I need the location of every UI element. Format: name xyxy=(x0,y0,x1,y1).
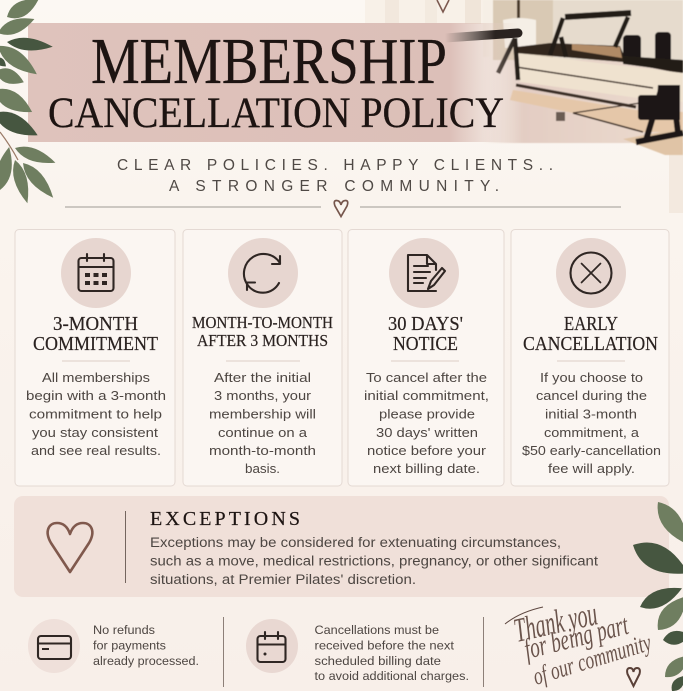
body text: you stay consistent xyxy=(32,425,158,440)
body text: commitment to help xyxy=(29,406,162,422)
note: cancellation deadline xyxy=(246,619,469,683)
heading: EARLY xyxy=(564,313,618,335)
body text: 3 months, your xyxy=(214,388,312,403)
tagline: CLEAR POLICIES. HAPPY CLIENTS.. xyxy=(117,157,553,174)
panel: early cancellation xyxy=(511,230,669,486)
body text: After the initial xyxy=(214,370,311,385)
body text: fee will apply. xyxy=(548,461,635,476)
text: scheduled billing date xyxy=(314,654,441,668)
handwritten thank you note: for being part xyxy=(521,609,632,666)
heading: exceptions: EXCEPTIONS xyxy=(150,508,300,530)
panel: exceptions xyxy=(14,496,669,597)
heading xyxy=(33,313,158,355)
text: No refunds xyxy=(93,623,155,637)
icon: circled x xyxy=(556,238,626,308)
body text: commitment, a xyxy=(544,425,640,440)
top curtain backdrop xyxy=(365,0,495,24)
text: already processed. xyxy=(93,654,199,668)
body text: please provide xyxy=(379,406,475,422)
body text: and see real results. xyxy=(31,443,161,458)
body text xyxy=(209,370,316,476)
text: received before the next xyxy=(314,638,455,652)
body text: continue on a xyxy=(218,425,308,440)
icon: heart outline xyxy=(48,523,92,572)
body text: initial 3-month xyxy=(545,406,637,422)
handwritten thank you note: Thank you xyxy=(511,596,601,650)
body text xyxy=(150,535,598,587)
divider with heart xyxy=(65,200,621,216)
text xyxy=(93,623,199,668)
heading xyxy=(388,313,463,355)
body text: month-to-month xyxy=(209,443,316,458)
panel: title band xyxy=(28,23,518,142)
panel: month-to-month xyxy=(183,230,342,486)
body text: such as a move, medical restrictions, pregnancy, or other significant xyxy=(150,554,598,568)
heading: cancellation policy: CANCELLATION POLICY xyxy=(48,90,504,137)
icon: document with pen xyxy=(389,238,459,308)
foliage: left branch xyxy=(0,0,58,205)
panel: 30 days notice xyxy=(348,230,504,486)
body text: membership will xyxy=(209,406,316,422)
icon: refresh arrows xyxy=(228,238,298,308)
body text xyxy=(364,370,489,476)
icon: small heart at top edge xyxy=(437,0,449,12)
body text: basis. xyxy=(245,461,280,476)
icon: credit card xyxy=(28,619,80,673)
text: for payments xyxy=(93,638,166,652)
reformer handle xyxy=(445,33,518,38)
heading: AFTER 3 MONTHS xyxy=(197,331,328,350)
body text: cancel during the xyxy=(536,388,647,403)
body text: next billing date. xyxy=(373,461,480,476)
photo: pilates reformer studio xyxy=(483,0,683,155)
body text: $50 early-cancellation xyxy=(522,443,661,458)
note: no refunds xyxy=(28,619,199,673)
icon: small heart xyxy=(627,668,640,686)
tagline: A STRONGER COMMUNITY. xyxy=(169,178,499,195)
heading: COMMITMENT xyxy=(33,333,158,355)
heading: membership: MEMBERSHIP xyxy=(91,25,447,98)
heading: CANCELLATION xyxy=(523,333,658,355)
body text xyxy=(26,370,166,458)
icon: calendar with dot xyxy=(246,619,298,673)
heading: MONTH-TO-MONTH xyxy=(192,313,333,332)
body text: If you choose to xyxy=(540,370,643,385)
heading: NOTICE xyxy=(393,333,458,355)
text: Cancellations must be xyxy=(314,623,439,637)
heading xyxy=(523,313,658,355)
foliage: right branch xyxy=(627,497,683,691)
handwritten thank you note xyxy=(505,596,655,691)
text xyxy=(314,623,469,683)
body text xyxy=(522,370,661,476)
heading xyxy=(192,313,333,350)
text: to avoid additional charges. xyxy=(314,669,469,683)
tagline xyxy=(117,157,553,195)
body text: situations, at Premier Pilates' discretion. xyxy=(150,572,416,587)
body text: notice before your xyxy=(367,443,487,458)
strip at right edge xyxy=(669,143,683,213)
body text: All memberships xyxy=(42,370,150,385)
heading: 30 DAYS' xyxy=(388,313,463,335)
panel: 3-month commitment xyxy=(15,230,175,486)
body text: 30 days' written xyxy=(376,425,478,440)
body text: Exceptions may be considered for extenuating circumstances, xyxy=(150,535,561,550)
body text: initial commitment, xyxy=(364,388,489,403)
body text: To cancel after the xyxy=(366,370,487,385)
icon: calendar xyxy=(61,238,131,308)
heading: 3-MONTH xyxy=(53,313,138,335)
body text: begin with a 3-month xyxy=(26,388,166,403)
